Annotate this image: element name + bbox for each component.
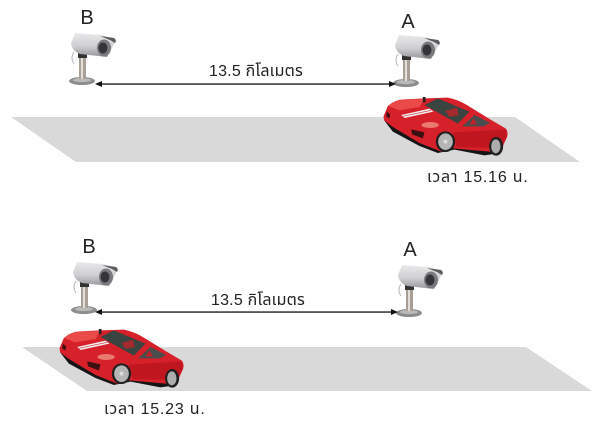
road: bottom scene <box>22 347 592 391</box>
distance label top: 13.5 กิโลเมตร <box>209 63 303 80</box>
label A top: A <box>401 11 415 33</box>
camera B bottom <box>71 262 118 314</box>
red car top <box>383 97 508 156</box>
camera A bottom <box>396 265 443 317</box>
distance arrow bottom <box>95 309 398 315</box>
label B bottom: B <box>82 236 96 258</box>
road: top scene <box>11 117 580 162</box>
camera A top <box>393 35 440 87</box>
time label bottom: เวลา 15.23 น. <box>104 401 206 418</box>
label B top: B <box>80 7 94 29</box>
time label top: เวลา 15.16 น. <box>427 169 529 186</box>
red car bottom <box>59 329 184 388</box>
camera B top <box>69 33 116 85</box>
distance arrow top <box>95 81 396 87</box>
label A bottom: A <box>403 239 417 261</box>
distance label bottom: 13.5 กิโลเมตร <box>211 292 305 309</box>
